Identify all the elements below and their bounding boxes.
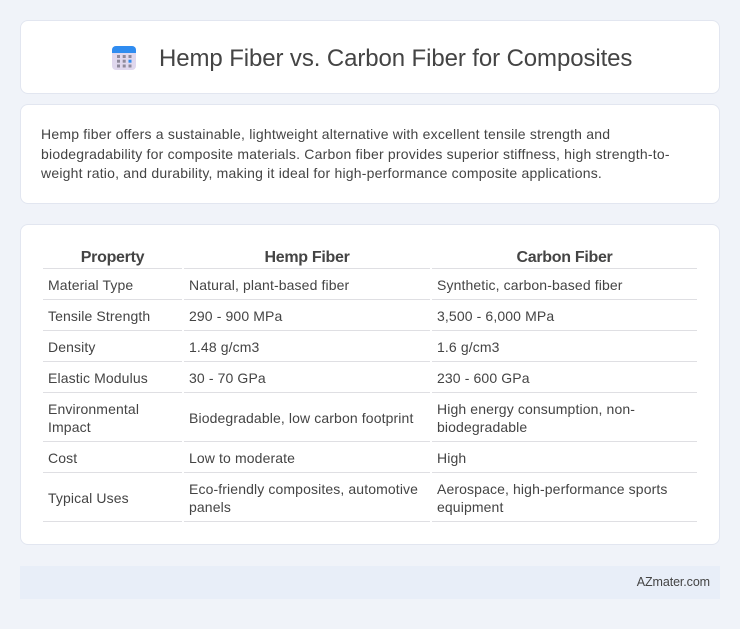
table content: Natural, plant-based fiber bbox=[189, 277, 349, 293]
row: Material Type: Material Type bbox=[48, 277, 133, 293]
intro text: Hemp fiber offers a sustainable, lightweight alternative with excellent tensile strength and bbox=[41, 126, 610, 142]
table content: Low to moderate bbox=[189, 450, 295, 466]
table content: High energy consumption, non- bbox=[437, 401, 635, 417]
row: Tensile Strength: Tensile Strength bbox=[48, 308, 150, 324]
title: Hemp Fiber vs. Carbon Fiber for Composites bbox=[159, 45, 632, 72]
table content: High bbox=[437, 450, 466, 466]
table content: biodegradable bbox=[437, 419, 527, 435]
table content: Synthetic, carbon-based fiber bbox=[437, 277, 623, 293]
table content bbox=[43, 249, 697, 522]
intro text: weight ratio, and durability, making it ideal for high-performance composite applications. bbox=[41, 165, 602, 181]
header: Carbon Fiber: Carbon Fiber bbox=[517, 249, 612, 266]
panel: comparison table bbox=[20, 224, 720, 545]
header: Property: Property bbox=[81, 249, 144, 266]
footer bbox=[20, 566, 720, 599]
row: Typical Uses: Typical Uses bbox=[48, 490, 129, 506]
table content: Biodegradable, low carbon footprint bbox=[189, 410, 413, 426]
table content: equipment bbox=[437, 499, 503, 515]
table content: panels bbox=[189, 499, 231, 515]
table content: 230 - 600 GPa bbox=[437, 370, 530, 386]
panel: introduction bbox=[20, 104, 720, 204]
row: Environmental Impact bbox=[48, 401, 139, 435]
table content: 3,500 - 6,000 MPa bbox=[437, 308, 554, 324]
intro text bbox=[41, 126, 670, 181]
row: Environmental Impact: Environmental bbox=[48, 401, 139, 417]
table content: 290 - 900 MPa bbox=[189, 308, 282, 324]
row: Elastic Modulus: Elastic Modulus bbox=[48, 370, 148, 386]
panel: header bbox=[20, 20, 720, 94]
table content: 1.6 g/cm3 bbox=[437, 339, 500, 355]
row: Density: Density bbox=[48, 339, 96, 355]
intro text: biodegradability for composite materials. Carbon fiber provides superior stiffness, high strength-to- bbox=[41, 146, 670, 162]
table content: Eco-friendly composites, automotive bbox=[189, 481, 418, 497]
table content: Aerospace, high-performance sports bbox=[437, 481, 668, 497]
footer brand: AZmater.com bbox=[637, 575, 710, 589]
row: Environmental Impact: Impact bbox=[48, 419, 91, 435]
row: Cost: Cost bbox=[48, 450, 77, 466]
header: Hemp Fiber: Hemp Fiber bbox=[264, 249, 350, 266]
table content: 30 - 70 GPa bbox=[189, 370, 266, 386]
table content: 1.48 g/cm3 bbox=[189, 339, 259, 355]
icon: calendar bbox=[112, 46, 136, 70]
